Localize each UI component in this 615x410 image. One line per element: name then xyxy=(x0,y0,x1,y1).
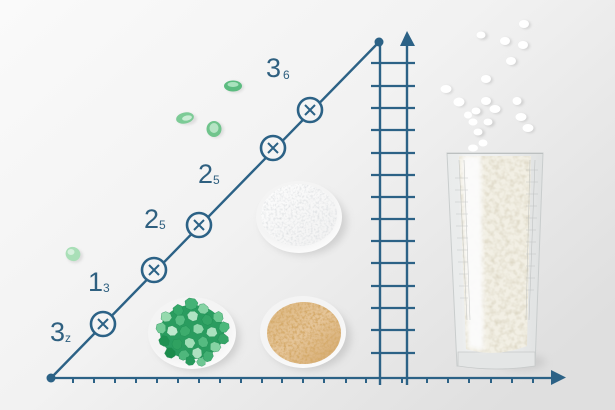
label 3-6: 6 xyxy=(283,68,290,82)
bowl: brown sugar xyxy=(260,296,351,370)
crystal middle left xyxy=(175,111,197,125)
diagonal line with markers xyxy=(46,38,384,382)
glass of white granules xyxy=(447,153,546,370)
label 2-5 lower: 2 xyxy=(144,204,159,234)
bright left side of granules xyxy=(462,156,484,351)
label 3z: z xyxy=(65,331,71,345)
marker 1 xyxy=(91,312,115,336)
bowl: green crystals xyxy=(148,297,240,371)
horizontal axis with ticks xyxy=(51,370,566,385)
crystal top xyxy=(224,80,244,93)
falling white pellets xyxy=(440,20,535,152)
marker 4 xyxy=(261,136,285,160)
marker 5 xyxy=(298,98,322,122)
vertical ladder scale xyxy=(371,31,415,385)
crystal left xyxy=(63,244,83,264)
label 3z: 3 xyxy=(50,317,65,347)
green crystal pile xyxy=(155,298,231,368)
label 3-6: 3 xyxy=(266,53,281,83)
marker 2 xyxy=(142,258,166,282)
crystal middle xyxy=(206,121,224,138)
granule fill xyxy=(459,156,531,353)
measuring grid on glass xyxy=(455,160,538,320)
scattered green crystals xyxy=(63,80,244,264)
label 2-5 upper: 5 xyxy=(213,173,220,187)
label 2-5 lower: 5 xyxy=(159,218,166,232)
chart axes and ladder scale xyxy=(46,31,566,385)
label 2-5 upper: 2 xyxy=(198,159,213,189)
marker 3 xyxy=(187,213,211,237)
label 1-3: 1 xyxy=(88,267,103,297)
label 1-3: 3 xyxy=(103,281,110,295)
bowl: white salt xyxy=(256,181,347,255)
glass base xyxy=(458,352,535,369)
